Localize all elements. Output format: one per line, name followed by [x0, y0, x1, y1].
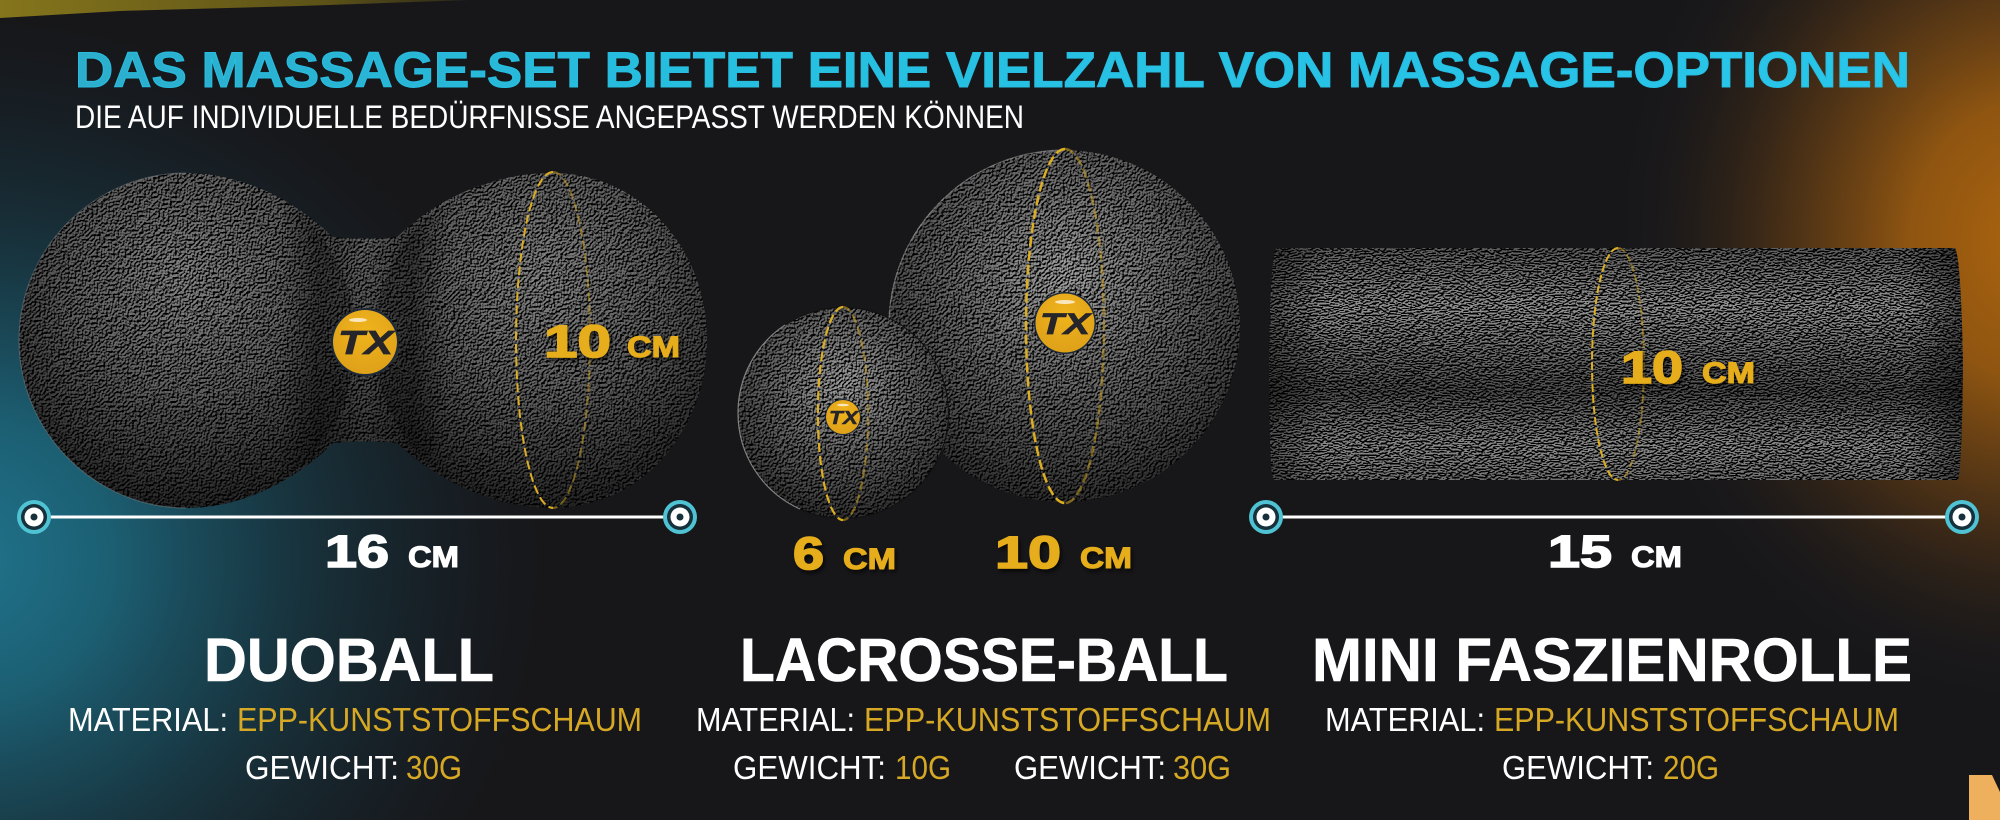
diameter label: 10 cm: CM [1702, 357, 1755, 390]
weight line small ball: 10G [895, 749, 951, 786]
product name: lacrosse-ball: LACROSSE-BALL [740, 626, 1228, 694]
diameter label: 6 cm: CM [843, 543, 896, 576]
weight line large ball: 30G [1173, 749, 1231, 786]
diameter label: 10 cm: 10 [1621, 342, 1683, 393]
diameter label: 6 cm: 6 [793, 528, 824, 579]
diameter label: 10 cm: 10 [544, 316, 611, 367]
icon: TX logo large ball: TX [1040, 308, 1093, 341]
dimension line: 16 cm [17, 500, 697, 534]
weight line: GEWICHT: [245, 749, 399, 786]
diameter label: 6 cm [793, 528, 896, 579]
material line: EPP-KUNSTSTOFFSCHAUM [1494, 701, 1899, 738]
weight line: 20G [1663, 749, 1719, 786]
large ball dashed ellipse [1026, 149, 1104, 503]
orange corner fragment [1969, 775, 2000, 820]
material line [696, 701, 1271, 738]
length label: 16 cm [325, 526, 459, 577]
panel: mini faszienrolle [1249, 248, 1979, 786]
diameter label: 10 cm [995, 527, 1132, 578]
weight line: GEWICHT: [1502, 749, 1654, 786]
length label: 15 cm [1548, 526, 1682, 577]
material line: EPP-KUNSTSTOFFSCHAUM [237, 701, 642, 738]
dimension line: 15 cm [1249, 500, 1979, 534]
material line: EPP-KUNSTSTOFFSCHAUM [864, 701, 1271, 738]
length label: 15 cm: 15 [1548, 526, 1612, 577]
length label: 16 cm: CM [408, 541, 459, 574]
panel: lacrosse balls [696, 149, 1271, 786]
diameter label: 10 cm: CM [1080, 542, 1132, 575]
material line [1325, 701, 1899, 738]
weight line: 30G [406, 749, 462, 786]
roller body [1269, 248, 1963, 480]
diameter label: 10 cm: 10 [995, 527, 1061, 578]
weight line small ball: GEWICHT: [733, 749, 886, 786]
material line: MATERIAL: [68, 701, 228, 738]
icon: TX logo small ball: TX [829, 408, 859, 428]
diameter label: 10 cm [544, 316, 680, 367]
length label: 15 cm: CM [1631, 541, 1682, 574]
material line: MATERIAL: [696, 701, 855, 738]
title: DAS MASSAGE-SET BIETET EINE VIELZAHL VON MASSAGE-OPTIONEN [75, 42, 1910, 98]
material line [68, 701, 642, 738]
weight line large ball: GEWICHT: [1014, 749, 1166, 786]
roller dashed ellipse [1592, 248, 1644, 480]
icon: TX logo large ball [1034, 292, 1096, 354]
product name: mini faszienrolle: MINI FASZIENROLLE [1312, 626, 1912, 694]
small ball dashed ellipse [818, 307, 868, 520]
subtitle: DIE AUF INDIVIDUELLE BEDÜRFNISSE ANGEPASST WERDEN KÖNNEN [75, 99, 1024, 135]
dashed circumference ellipse [516, 172, 590, 508]
product name: duoball: DUOBALL [204, 626, 494, 694]
decorative olive strip at top edge [0, 0, 470, 18]
panel: duoball [16, 170, 710, 786]
duoball body [16, 170, 710, 510]
icon: TX logo [331, 308, 399, 376]
icon: TX logo small ball [825, 399, 861, 435]
length label: 16 cm: 16 [325, 526, 389, 577]
large ball [888, 150, 1240, 502]
diameter label: 10 cm [1621, 342, 1755, 393]
small ball [737, 307, 949, 519]
icon: TX logo: TX [338, 324, 396, 361]
diameter label: 10 cm: CM [627, 331, 680, 364]
material line: MATERIAL: [1325, 701, 1485, 738]
